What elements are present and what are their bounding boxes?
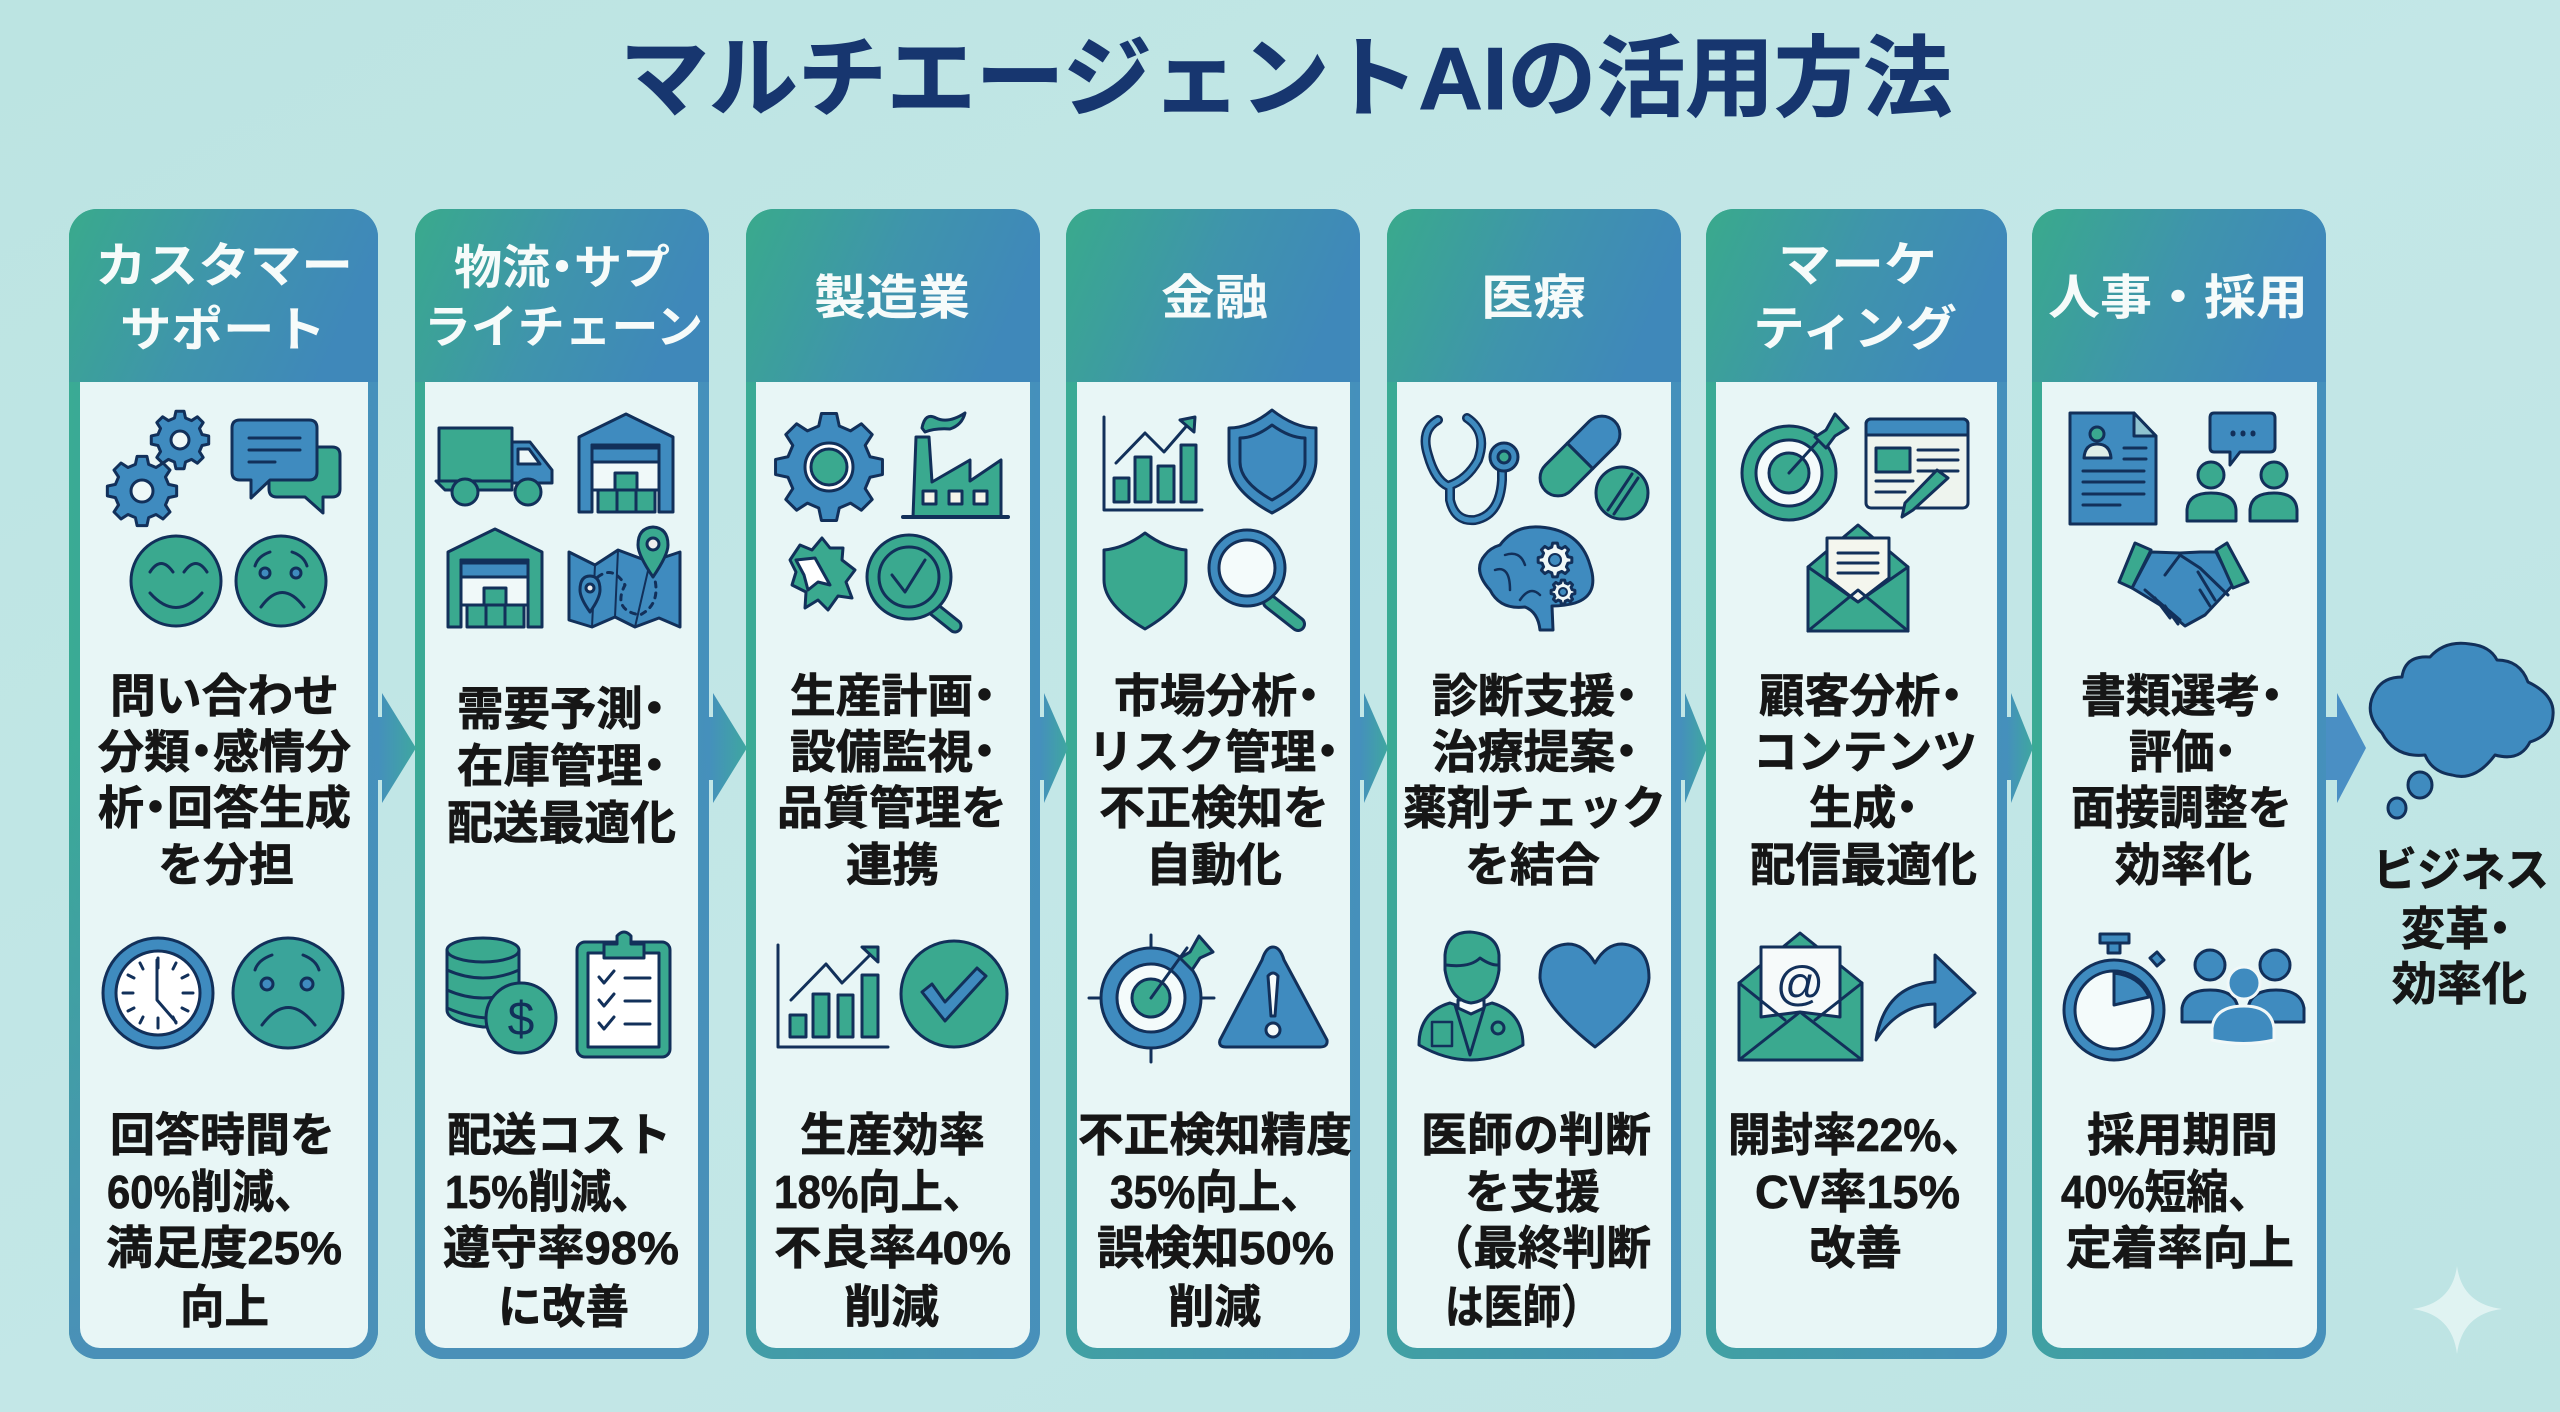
arrow: 2 xyxy=(709,693,747,803)
heading: 人事・採用: 人事・採用 xyxy=(2048,272,2308,325)
icon: interview people xyxy=(2187,413,2297,521)
heading: 金融: 金融 xyxy=(1161,272,1268,325)
text: outcome: ビジネス xyxy=(2373,844,2549,896)
text: description: 需要予測・ xyxy=(457,683,666,735)
text: description: 効率化 xyxy=(2115,839,2252,891)
arrow: 3 xyxy=(1040,693,1068,803)
icon: blue shield xyxy=(1229,410,1316,513)
icon: handshake xyxy=(2119,543,2248,626)
text: description xyxy=(447,683,676,849)
text: description: 問い合わせ xyxy=(110,670,339,722)
text: description: 品質管理を xyxy=(777,782,1007,834)
icon: check circle xyxy=(901,941,1007,1047)
arrow: 7 xyxy=(2326,693,2366,803)
icon: truck xyxy=(436,428,552,505)
text: description: 配信最適化 xyxy=(1750,839,1977,891)
text: description: 診断支援・ xyxy=(1432,670,1638,722)
text: description: 配送最適化 xyxy=(447,797,676,849)
text: results: 配送コスト xyxy=(447,1109,671,1161)
text: results: 不良率40% xyxy=(774,1222,1011,1274)
text: results xyxy=(2061,1109,2294,1274)
icon: target green xyxy=(1742,414,1848,520)
heading: マーケティング: マーケ xyxy=(1778,239,1937,292)
arrow: 5 xyxy=(1681,693,1707,803)
text: results xyxy=(774,1109,1011,1333)
text: description xyxy=(1750,670,1977,891)
icon: clipboard xyxy=(577,932,670,1057)
text: results: 35%向上、 xyxy=(1110,1166,1323,1218)
heading: 医療: 医療 xyxy=(1481,272,1586,325)
icon: defect burst xyxy=(790,538,855,610)
icon: capsule and pill xyxy=(1533,409,1648,519)
icon: warehouse blue xyxy=(579,414,673,512)
text: description: 生産計画・ xyxy=(790,670,996,722)
icon: green shield xyxy=(1104,533,1186,629)
icon: chat bubbles xyxy=(232,420,340,513)
icon: worried face xyxy=(233,938,343,1048)
panel: マーケティング xyxy=(1706,209,2007,1359)
text: description: 面接調整を xyxy=(2071,782,2292,834)
heading: カスタマーサポート: カスタマー xyxy=(95,240,353,293)
icon: gear xyxy=(776,414,882,520)
text: outcome: 効率化 xyxy=(2392,958,2527,1010)
arrow: 6 xyxy=(2007,693,2033,803)
icon: factory xyxy=(903,413,1008,517)
text: results: （最終判断 xyxy=(1429,1222,1651,1274)
text: description xyxy=(777,670,1007,891)
arrow: 4 xyxy=(1360,693,1388,803)
text: results: は医師） xyxy=(1445,1281,1600,1333)
text: description: 薬剤チェック xyxy=(1403,782,1666,834)
icon: gears xyxy=(107,411,209,526)
heading: マーケティング: ティング xyxy=(1753,303,1957,356)
icon: warehouse green xyxy=(448,529,542,627)
text: results: 医師の判断 xyxy=(1421,1109,1651,1161)
icon: magnifier with check xyxy=(867,535,955,626)
text: description xyxy=(1403,670,1666,891)
text: results: CV率15% xyxy=(1755,1166,1960,1218)
text: description xyxy=(2071,670,2292,891)
text: results: 向上 xyxy=(180,1281,269,1333)
panel: 人事・採用 xyxy=(2032,209,2326,1359)
panel: 製造業 xyxy=(746,209,1040,1359)
text: description: 設備監視・ xyxy=(790,726,996,778)
text: results: 生産効率 xyxy=(800,1109,985,1161)
text: description xyxy=(98,670,351,891)
icon: team xyxy=(2182,950,2304,1044)
icon: envelope with letter xyxy=(1808,525,1908,631)
panel: 金融 xyxy=(1066,209,1360,1359)
text: description: 連携 xyxy=(846,839,939,891)
text: description: 析・回答生成 xyxy=(98,782,351,834)
text: results: 削減 xyxy=(1168,1281,1261,1333)
icon: growth chart xyxy=(778,945,888,1047)
icon: thought cloud xyxy=(2370,643,2553,818)
text: results: を支援 xyxy=(1465,1166,1600,1218)
text: results: 誤検知50% xyxy=(1097,1222,1334,1274)
text: results xyxy=(106,1109,342,1333)
heading: カスタマーサポート: サポート xyxy=(120,304,326,357)
text: description: コンテンツ xyxy=(1753,726,1977,778)
text: results: に改善 xyxy=(498,1281,629,1333)
heading: 製造業: 製造業 xyxy=(814,272,970,325)
text: description: 治療提案・ xyxy=(1432,726,1638,778)
text: description: 書類選考・ xyxy=(2081,670,2283,722)
text: results: 回答時間を xyxy=(110,1109,335,1161)
icon: smile face xyxy=(131,536,221,626)
icon: target xyxy=(1089,935,1214,1062)
heading: 物流・サプライチェーン: 物流・サプ xyxy=(454,241,670,294)
text: results xyxy=(1421,1109,1651,1333)
text: results: 採用期間 xyxy=(2087,1109,2278,1161)
icon: stethoscope xyxy=(1426,418,1518,520)
icon: forward arrow xyxy=(1876,955,1975,1040)
text: description: を分担 xyxy=(158,839,294,891)
text: results xyxy=(443,1109,679,1333)
text: description: 不正検知を xyxy=(1099,782,1329,834)
text: results: 15%削減、 xyxy=(445,1166,653,1218)
text: results xyxy=(1078,1109,1352,1333)
text: description xyxy=(1088,670,1339,891)
icon: doctor xyxy=(1419,932,1523,1060)
text: results: 改善 xyxy=(1809,1222,1902,1274)
icon: magnifier xyxy=(1209,530,1298,624)
icon: market chart xyxy=(1104,417,1202,510)
icon: stopwatch xyxy=(2064,934,2164,1060)
text: results: 40%短縮、 xyxy=(2061,1166,2270,1218)
heading: 物流・サプライチェーン: ライチェーン xyxy=(424,301,703,353)
panel: 医療 xyxy=(1387,209,1681,1359)
icon: sparkle xyxy=(2412,1266,2502,1354)
icon: email at: @ xyxy=(1776,958,1824,1011)
text: description: 市場分析・ xyxy=(1114,670,1320,722)
text: results xyxy=(1728,1109,1984,1274)
icon: sad face xyxy=(236,536,326,626)
icon: warning triangle xyxy=(1220,947,1327,1047)
text: results: 満足度25% xyxy=(106,1222,342,1274)
text: results: 定着率向上 xyxy=(2066,1222,2294,1274)
text: results: 不正検知精度 xyxy=(1078,1109,1352,1161)
icon: brain with gears xyxy=(1480,527,1593,630)
icon: clock xyxy=(103,938,213,1048)
text: results: 削減 xyxy=(844,1281,939,1333)
text: description: を結合 xyxy=(1465,839,1600,891)
icon: coins xyxy=(447,938,556,1053)
text: description: 生成・ xyxy=(1809,782,1918,834)
panel: 物流・サプライチェーン xyxy=(415,209,709,1359)
text: description: 分類・感情分 xyxy=(98,726,351,778)
icon: web page and pencil xyxy=(1866,419,1968,517)
text: description: 自動化 xyxy=(1146,839,1282,891)
text: description: 評価・ xyxy=(2129,726,2236,778)
title: マルチエージェントAIの活用方法 xyxy=(620,29,1952,128)
icon: heart xyxy=(1540,944,1649,1047)
text: description: 在庫管理・ xyxy=(457,740,666,792)
icon: coins: $ xyxy=(508,993,534,1046)
text: description: 顧客分析・ xyxy=(1759,670,1963,722)
text: results: 60%削減、 xyxy=(107,1166,316,1218)
heading: 物流・サプライチェーン xyxy=(424,241,703,353)
text: outcome xyxy=(2373,844,2549,1010)
panel: カスタマーサポート xyxy=(69,209,378,1359)
heading: カスタマーサポート xyxy=(95,240,353,357)
text: results: 開封率22%、 xyxy=(1728,1109,1984,1161)
text: results: 18%向上、 xyxy=(774,1166,985,1218)
heading: マーケティング xyxy=(1753,239,1957,356)
icon: resume xyxy=(2070,413,2156,524)
arrow: 1 xyxy=(378,693,416,803)
icon: map with pins xyxy=(569,527,680,627)
text: outcome: 変革・ xyxy=(2401,903,2511,955)
text: results: 遵守率98% xyxy=(443,1222,679,1274)
text: description: リスク管理・ xyxy=(1088,726,1339,778)
icon: email at xyxy=(1739,933,1862,1060)
